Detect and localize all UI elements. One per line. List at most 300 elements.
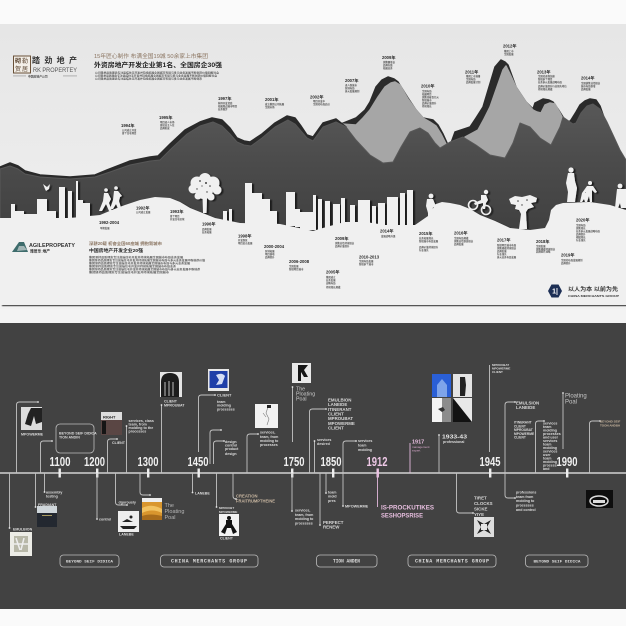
timeline annotations: services xyxy=(543,439,557,443)
timeline annotations: desired xyxy=(317,442,330,446)
upper year labels: 集团上市准备 xyxy=(466,74,481,78)
logo: Agile property: AGILEPROPEATY xyxy=(29,243,76,249)
lower year labels: 2017年 xyxy=(497,236,511,244)
skyline left xyxy=(11,181,90,220)
year labels: 1945 xyxy=(480,454,500,469)
lower year labels: 品牌价值持续提升 xyxy=(419,245,439,249)
lower year labels: 项目启动发展 xyxy=(238,241,253,245)
foreground ground xyxy=(0,197,626,305)
upper year labels: 新增城市 xyxy=(422,98,432,102)
timeline annotations: 1933-43 xyxy=(442,434,467,440)
lower year labels xyxy=(99,204,601,289)
timeline annotations: team xyxy=(328,490,336,494)
timeline annotations: MPROUBAT xyxy=(514,428,533,432)
year labels: 1850 xyxy=(320,454,342,469)
timeline annotations: YIYE xyxy=(474,512,484,517)
timeline annotations: team xyxy=(543,442,551,446)
lower year labels: 1996年 xyxy=(202,220,216,228)
icon: runners xyxy=(99,186,122,211)
timeline annotations: and user xyxy=(543,436,559,440)
timeline annotations: molding xyxy=(543,460,557,464)
timeline annotations: molding xyxy=(358,448,372,452)
lower year labels: 2009年 xyxy=(335,235,349,242)
heading: company intro: 公司秉承品质理念专注高端住宅开发并持续拓展全国城市布局与多元业务发展不断创造 xyxy=(95,76,203,80)
lower year labels: 全国布局 xyxy=(576,223,586,227)
lower year labels: 1992-2004 xyxy=(99,220,120,225)
timeline annotations: MPOWERME xyxy=(492,366,510,370)
timeline annotations: services, class xyxy=(128,419,154,423)
lower year labels: 行业领先 xyxy=(576,238,586,242)
heading: company intro xyxy=(94,52,223,80)
upper year labels: 品牌价值提升行业领先地位 xyxy=(538,84,567,88)
upper year labels: 1994年 xyxy=(121,122,135,129)
timeline annotations: CLIENT xyxy=(164,400,178,404)
timeline annotations: Ploating xyxy=(296,392,315,398)
image: emulsion xyxy=(10,532,32,556)
lower year labels: 新增城市布局发展 xyxy=(419,239,439,243)
text block: group overview: 集团坚持品质理念专注高端住宅开发并持续拓展全国城市布局与多元业务发展 xyxy=(89,261,191,265)
upper year labels: 全国化进程加速 xyxy=(538,74,555,78)
text block: group overview: 集团坚持品质理念专注高端住宅开发并持续拓展全国城市布局业务 xyxy=(89,264,177,268)
upper year labels: 2013年 xyxy=(537,68,551,76)
timeline annotations: Ploating xyxy=(164,509,184,515)
lower year labels: 2016年 xyxy=(454,230,468,236)
upper year labels: 拓展周边城市项目 xyxy=(218,104,238,108)
timeline annotations: molding xyxy=(543,446,557,450)
heading: company intro: 公司秉承品质理念专注高端住宅开发并持续拓展全国城市布局与多元业务发展不断创造价值回报社会 xyxy=(95,74,218,78)
timeline annotations: Poal xyxy=(164,515,176,521)
timeline annotations: team, from xyxy=(128,422,147,426)
timeline annotations: EMULBION xyxy=(328,398,351,402)
group capsules: BEYOND SEIF DIDICA xyxy=(534,561,581,565)
upper year labels: 2014年 xyxy=(581,74,595,82)
upper year labels: 进入新城市 xyxy=(345,83,358,87)
lower year labels: 全国发展 xyxy=(536,244,546,248)
image: silhouettes xyxy=(21,407,42,430)
text block: group overview: 深耕20载 初奋全国60座城 拥抱新城市 xyxy=(89,240,163,247)
timeline annotations: EMULSION xyxy=(516,400,539,406)
lower year labels: 发展战略升级 xyxy=(381,234,396,238)
timeline annotations: and control xyxy=(516,508,536,512)
timeline annotations: MPOWERME xyxy=(328,421,355,426)
timeline annotations: BEYOND SEIF xyxy=(600,420,621,424)
timeline annotations: control xyxy=(99,518,111,522)
lower year labels: 行业领先 xyxy=(497,252,507,256)
timeline annotations: processes xyxy=(217,408,235,412)
lower year labels: 项目落地 xyxy=(265,252,275,256)
lower year labels: 2020年 xyxy=(576,216,590,224)
callout box: Beyond Seif xyxy=(56,424,97,453)
lower year labels: 业务发展 xyxy=(326,278,336,282)
timeline annotations: molding xyxy=(217,404,231,408)
heading: company intro: 外资房地产开发企业第1名、全国房企30强 xyxy=(94,60,223,69)
lower year labels: 行业领先 xyxy=(419,248,429,252)
upper year labels: 2007年 xyxy=(345,77,359,84)
upper year labels: 2002年 xyxy=(310,94,324,100)
text block: group overview: 中国房地产开发企业20强 xyxy=(89,247,143,254)
lower year labels: 1993年 xyxy=(170,208,184,215)
upper year labels: 首批业主入住 xyxy=(160,123,175,127)
timeline annotations: CREATION xyxy=(236,494,258,498)
timeline annotations: CLIENT xyxy=(514,436,526,440)
timeline annotations: IS-PROCKUTIKES xyxy=(381,504,434,512)
timeline annotations: professions xyxy=(516,490,536,494)
upper year labels: 2001年 xyxy=(265,96,279,103)
image: clocks xyxy=(474,517,494,537)
timeline axis xyxy=(0,468,626,478)
upper year labels: 拓展项目 xyxy=(422,92,432,96)
upper year labels: 品牌发展计划 xyxy=(466,80,481,84)
timeline annotations: CLOCKS xyxy=(474,501,493,506)
icon: cyclist xyxy=(468,190,490,214)
lower year labels: 全国布局发展 xyxy=(359,259,374,263)
lower year labels: 开发新区 xyxy=(238,238,248,242)
timeline annotations: processes xyxy=(128,430,146,434)
timeline annotations: SICKE xyxy=(474,506,487,512)
lower year labels: 品牌提升 xyxy=(265,255,275,259)
logo: China Merchants: 以人为本 以前为先 xyxy=(568,285,619,293)
upper year labels: 2012年 xyxy=(503,42,517,50)
image: desert xyxy=(142,498,162,520)
logo: RK property: RK PROPERTEY xyxy=(33,68,77,74)
timeline annotations: expert xyxy=(412,448,421,452)
timeline annotations: molding to xyxy=(295,517,314,521)
lower year labels: 销售增长 xyxy=(576,226,586,230)
timeline annotations: CLIENT xyxy=(514,424,526,428)
timeline annotations: MPROUBAT xyxy=(492,363,509,367)
timeline annotations: CLIENT xyxy=(112,441,126,445)
timeline annotations: product xyxy=(225,447,239,451)
logo: RK property: 踏劲地产 xyxy=(32,55,77,65)
upper year labels: 多元发展规划 xyxy=(345,89,360,93)
year labels: 1750 xyxy=(284,454,304,469)
timeline annotations: MPOWERME xyxy=(21,432,44,436)
heading: company intro: 公司秉承品质理念专注高端住宅开发并持续拓展全国城市布局与多元业务发展不断创造价值回报社会 xyxy=(95,70,220,74)
upper year labels: 业务多元发展战略布局 xyxy=(538,80,563,84)
timeline annotations: molding to xyxy=(260,439,279,443)
image grid xyxy=(432,374,472,422)
year labels xyxy=(50,454,578,469)
lower year labels: 多元业务布局发展 xyxy=(497,255,517,259)
lower year labels: 1992年 xyxy=(136,204,150,212)
lower year labels: 新增多个城市 xyxy=(359,262,374,266)
timeline annotations: team xyxy=(543,456,551,460)
mountain range xyxy=(0,60,626,240)
text block: group overview: 集团坚持品质理念专注高端住宅开发并持续拓展全国城市布局与多元业务发展不断创造 xyxy=(89,267,201,271)
timeline annotations: 1917 xyxy=(412,440,424,446)
timeline annotations: professional xyxy=(443,440,464,444)
year labels: 1990 xyxy=(556,454,578,469)
upper year labels: 持续增长规模 xyxy=(538,87,553,91)
timeline annotations: molding xyxy=(543,428,557,432)
upper year labels: 销售突破百亿元 xyxy=(422,95,439,99)
logo: RK property: 居 xyxy=(22,66,28,73)
group capsules: TION ANDEN xyxy=(333,559,360,565)
upper year labels: 新增多个项目 xyxy=(538,77,553,81)
timeline annotations: services xyxy=(543,450,557,454)
top panel: history wall xyxy=(0,24,626,323)
upper year labels: 拓展业务 xyxy=(383,66,393,70)
timeline annotations: TIRET xyxy=(474,496,487,500)
timeline annotations: CLIENT xyxy=(492,370,503,374)
lower year labels: 品牌发展 xyxy=(454,242,464,246)
timeline annotations: LANEBE xyxy=(119,532,134,536)
timeline annotations: services xyxy=(358,439,372,443)
lower year labels: 公司成立发展 xyxy=(136,210,151,214)
year labels: 1300 xyxy=(138,454,158,469)
upper year labels: 业务稳步 xyxy=(218,107,228,111)
callout box: Beyond Seif: BEYOND SEIF DIDICA xyxy=(59,432,97,436)
upper year labels: 2010年 xyxy=(421,82,435,90)
timeline annotations: team, from xyxy=(260,435,278,439)
timeline annotations: mold xyxy=(328,494,337,498)
white foreground landscape xyxy=(0,167,626,305)
timeline annotations: FRAITRUMPTHEINE xyxy=(236,498,275,504)
timeline annotations xyxy=(13,363,621,540)
timeline annotations: processes xyxy=(260,443,278,447)
lower year labels: 规模增长 xyxy=(576,235,586,239)
logo: RK property: 勒 xyxy=(22,57,28,65)
timeline annotations: TOON ANDBH xyxy=(600,424,620,428)
timeline annotations: ITINERANT xyxy=(514,420,532,424)
icon: family figures xyxy=(566,167,626,208)
timeline annotations: CLIENT xyxy=(220,536,234,540)
year labels: 1450 xyxy=(188,454,208,469)
upper year labels: 项目进入市场 xyxy=(160,120,175,124)
timeline annotations: MPOWERME xyxy=(345,504,369,508)
timeline annotations: services xyxy=(543,422,557,426)
group capsules: CHINA MERCHANTS GROUP xyxy=(171,559,247,565)
timeline annotations: user xyxy=(543,453,551,457)
lower year labels: 新增项目城市布局 xyxy=(497,243,517,247)
lower year labels: 品牌发展 xyxy=(202,227,212,231)
timeline annotations: The xyxy=(164,503,174,509)
year labels: 1100 xyxy=(50,454,70,469)
front mountain ridge xyxy=(0,104,626,240)
lower year labels: 品牌提升 xyxy=(576,232,586,236)
logo: RK property: 中国房地产公司 xyxy=(28,74,48,78)
lower year labels: 业务拓展 xyxy=(202,230,212,234)
lower year labels: 早期发展 xyxy=(100,226,110,230)
logo: China Merchants: 1| xyxy=(552,288,558,296)
text block: group overview: 集团坚持品质理念专注高端住宅开发并持续拓展全国城市布局业务发展 xyxy=(89,255,184,259)
upper year labels: 公司成立开发 xyxy=(122,128,137,132)
timeline annotations: design xyxy=(225,452,237,456)
lower year labels: 区域拓展 xyxy=(265,249,275,253)
timeline annotations: dgorously xyxy=(118,500,136,504)
timeline annotations: team xyxy=(217,400,225,404)
timeline annotations: CLIENT xyxy=(217,392,232,398)
thumbnails xyxy=(10,363,613,556)
lower year labels: 2005年 xyxy=(326,268,340,276)
lower year labels: 销售业绩新高增长 xyxy=(454,239,474,243)
upper year labels xyxy=(121,42,601,135)
timeline annotations: MPOWERME xyxy=(514,432,535,436)
timeline annotations: LANEIDE xyxy=(516,405,535,410)
timeline annotations: CLIENT xyxy=(328,426,344,430)
timeline annotations: molding to the xyxy=(128,426,153,430)
lower year labels: 销售规模持续增长 xyxy=(497,246,517,250)
lower year labels: 集团成立 xyxy=(326,275,336,279)
lower year labels: 销售业绩持续增长 xyxy=(335,241,355,245)
back mountain shadow right xyxy=(451,60,563,170)
lower year labels: 2014年 xyxy=(380,228,394,234)
upper year labels: 品牌升级 xyxy=(383,63,393,67)
back mountain shadow left xyxy=(340,77,448,175)
connector lines xyxy=(9,365,601,529)
timeline annotations: control xyxy=(225,444,237,448)
timeline annotations: PERFECT xyxy=(323,520,344,525)
text block: group overview xyxy=(89,240,206,274)
lower year labels: 全国布局规模 xyxy=(454,236,469,240)
upper year labels: 全国市场 xyxy=(265,105,275,109)
image: sketch xyxy=(255,404,278,428)
lower year labels: 全国化布局发展规划 xyxy=(561,258,583,262)
timeline annotations: pres xyxy=(328,499,336,503)
2014 peak shadow xyxy=(566,99,610,140)
timeline annotations: services, xyxy=(260,430,275,434)
timeline annotations: services xyxy=(317,438,331,442)
lower year labels: 2000-2004 xyxy=(264,244,285,249)
upper year labels: 1995年 xyxy=(159,114,173,121)
image: flag logo xyxy=(292,363,311,383)
ridge shadow layer xyxy=(0,116,346,240)
lower year labels: 1998年 xyxy=(238,232,252,240)
upper year labels: 全国发展 xyxy=(504,52,514,56)
lower year labels: 品牌提升战略 xyxy=(536,250,551,254)
logo: Agile property xyxy=(12,242,76,254)
icon: tree left xyxy=(188,173,222,213)
group capsules xyxy=(60,555,588,567)
heading: company intro: 15年匠心制作 布满全国19城 50余家上市集团 xyxy=(94,52,208,60)
logo: Agile property: 雅居乐 地产 xyxy=(30,248,50,254)
logo: RK property: 砌 xyxy=(15,57,21,65)
upper year labels: 持续增长 xyxy=(422,104,432,108)
upper year labels: 全国布局 xyxy=(422,89,432,93)
lower year labels: 开发住宅区域 xyxy=(170,217,185,221)
timeline annotations: ITINERANT xyxy=(328,407,352,412)
upper year labels: 全国化布局启动 xyxy=(313,102,330,106)
upper year labels: 首个住宅项目 xyxy=(122,131,137,135)
lower year labels: 2010-2013 xyxy=(359,254,380,260)
timeline annotations: design xyxy=(225,440,237,444)
upper year labels: 成立集团公司拓展 xyxy=(265,102,285,106)
logo: China Merchants: CHINA MERCHANTS GROUP xyxy=(568,294,619,298)
lower year labels: 业务多元发展战略布局 xyxy=(576,229,601,233)
timeline annotations: FRADIANT xyxy=(38,503,57,507)
year labels: 1200 xyxy=(84,454,105,469)
skyline centre xyxy=(223,183,413,230)
upper year labels: 1997年 xyxy=(218,95,232,102)
upper year labels: 项目开发中 xyxy=(313,99,326,103)
upper year labels: 品牌价值提升 xyxy=(422,101,437,105)
timeline annotations: processes xyxy=(295,522,313,526)
back mountain gray left xyxy=(341,82,447,170)
image: lanebe xyxy=(118,511,139,532)
image: dark badge xyxy=(586,490,613,508)
logo: RK property: 贺 xyxy=(15,65,21,73)
timeline annotations: CLIENT xyxy=(328,412,344,416)
timeline annotations: team from xyxy=(516,495,533,499)
group capsules: BEYOND SEIF DIDICA xyxy=(66,561,114,565)
timeline annotations: and xyxy=(543,467,549,471)
back mountain gray right xyxy=(465,66,563,170)
image: figure xyxy=(219,514,239,536)
lower year labels: 全国发展 xyxy=(289,264,299,268)
timeline annotations: RENEW xyxy=(323,524,340,530)
image: poster xyxy=(101,412,122,435)
logo: China Merchants xyxy=(548,284,619,298)
timeline annotations: team xyxy=(543,425,551,429)
timeline annotations: Poal xyxy=(565,400,577,406)
upper year labels: 品牌发展 xyxy=(581,87,591,91)
timeline annotations: management xyxy=(412,445,430,449)
lower year labels: 2019年 xyxy=(561,252,575,258)
text block: group overview: 集团坚持品质理念专注高端住宅开发并持续拓展全国城市布局与多元业务发展不断创造价值 xyxy=(89,258,206,262)
group capsules: CHINA MERCHANTS GROUP xyxy=(415,559,489,565)
timeline annotations: MPROUBAT xyxy=(164,404,185,408)
timeline annotations: LANEBE xyxy=(195,492,210,496)
upper year labels: 品牌形成 xyxy=(160,126,170,130)
timeline annotations: MPOWERME xyxy=(219,510,237,514)
lower year labels: 业务拓展增长 xyxy=(419,236,434,240)
upper year labels: 集团上市 xyxy=(504,49,514,53)
lower year labels: 品牌发展 xyxy=(497,249,507,253)
upper year labels: 2009年 xyxy=(382,54,396,61)
timeline annotations: LANEIDE xyxy=(328,402,347,407)
upper year labels: 区域布局 xyxy=(345,86,355,90)
logo: RK property xyxy=(13,55,77,78)
tree leaf gaps xyxy=(196,180,528,206)
lower year labels: 品牌价值提升 xyxy=(335,244,350,248)
lower year labels: 2006-2008 xyxy=(289,259,310,264)
upper year labels: 全国销售业绩增长 xyxy=(581,81,601,85)
upper year labels: 2011年 xyxy=(465,68,478,76)
text block: group overview: 集团坚持品质理念专注高端住宅开发并持续拓展全国城市 xyxy=(89,270,170,274)
lower year labels: 新增项目城市 xyxy=(289,267,304,271)
image: blue poster xyxy=(208,369,229,391)
lower year labels: 战略布局 xyxy=(326,281,336,285)
timeline annotations: SESHOPSRISE xyxy=(381,512,423,520)
upper year labels: 全国布局 xyxy=(466,77,476,81)
lower year labels: 品牌提升 xyxy=(561,261,571,265)
timeline annotations: testing xyxy=(46,494,58,498)
timeline annotations: process xyxy=(543,464,557,468)
timeline annotations: molding to xyxy=(516,499,535,503)
timeline annotations: MPROUBAT xyxy=(328,416,353,421)
timeline annotations: The xyxy=(296,386,305,392)
icon: bird xyxy=(43,184,50,191)
lower year labels: 2015年 xyxy=(419,230,433,237)
lower year labels: 2018年 xyxy=(536,238,550,245)
timeline annotations: assembly xyxy=(46,490,62,494)
timeline annotations: processes xyxy=(543,432,561,436)
upper year labels: 城市布局新增 xyxy=(581,84,596,88)
bottom panel: dark timeline xyxy=(0,323,626,609)
timeline annotations: team xyxy=(358,444,366,448)
timeline annotations: Poal xyxy=(296,396,307,402)
lower year labels: 持续增长规模 xyxy=(326,285,341,289)
timeline annotations: Ploating xyxy=(565,394,587,400)
image: fradiant xyxy=(37,506,57,527)
icon: walking person xyxy=(426,194,438,223)
icon: tree right xyxy=(509,195,537,229)
callout box: Beyond Seif: TION ANDIN xyxy=(59,436,80,440)
timeline annotations: services, xyxy=(295,508,310,512)
lower year labels: 首个项目 xyxy=(170,214,180,218)
image: poster: RIGHT xyxy=(103,414,116,420)
timeline annotations: EMULBION xyxy=(13,528,33,532)
